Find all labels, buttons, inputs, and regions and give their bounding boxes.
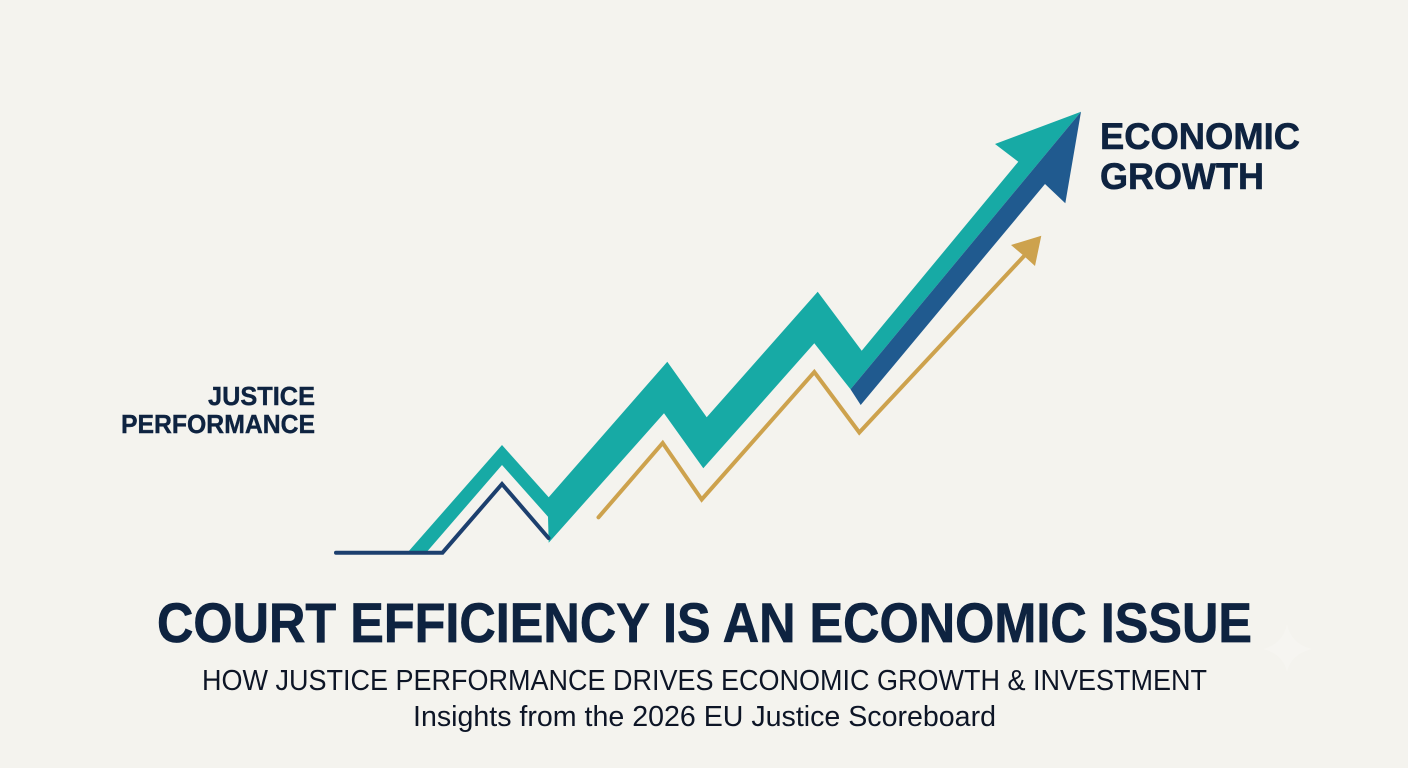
line: navy baseline rising to first peak bbox=[336, 484, 548, 553]
source line: Insights from the 2026 EU Justice Scoreboard bbox=[413, 701, 996, 733]
label: economic growth: GROWTH bbox=[1100, 156, 1264, 197]
label: justice performance bbox=[121, 381, 315, 439]
label: economic growth bbox=[1100, 116, 1300, 197]
icon: faint sparkle bbox=[1263, 624, 1312, 672]
label: economic growth: ECONOMIC bbox=[1100, 116, 1300, 157]
subtitle: HOW JUSTICE PERFORMANCE DRIVES ECONOMIC GROWTH & INVESTMENT bbox=[202, 665, 1207, 697]
arrow: main teal zigzag rising to economic growth bbox=[408, 112, 1081, 552]
chart: rising arrows bbox=[336, 112, 1081, 553]
arrow: thin gold trend line bbox=[598, 236, 1041, 517]
label: justice performance: JUSTICE bbox=[208, 381, 315, 411]
label: justice performance: PERFORMANCE bbox=[121, 409, 315, 439]
arrow: dark blue shadow edge and arrowhead bbox=[850, 112, 1081, 405]
title: COURT EFFICIENCY IS AN ECONOMIC ISSUE bbox=[157, 591, 1252, 654]
